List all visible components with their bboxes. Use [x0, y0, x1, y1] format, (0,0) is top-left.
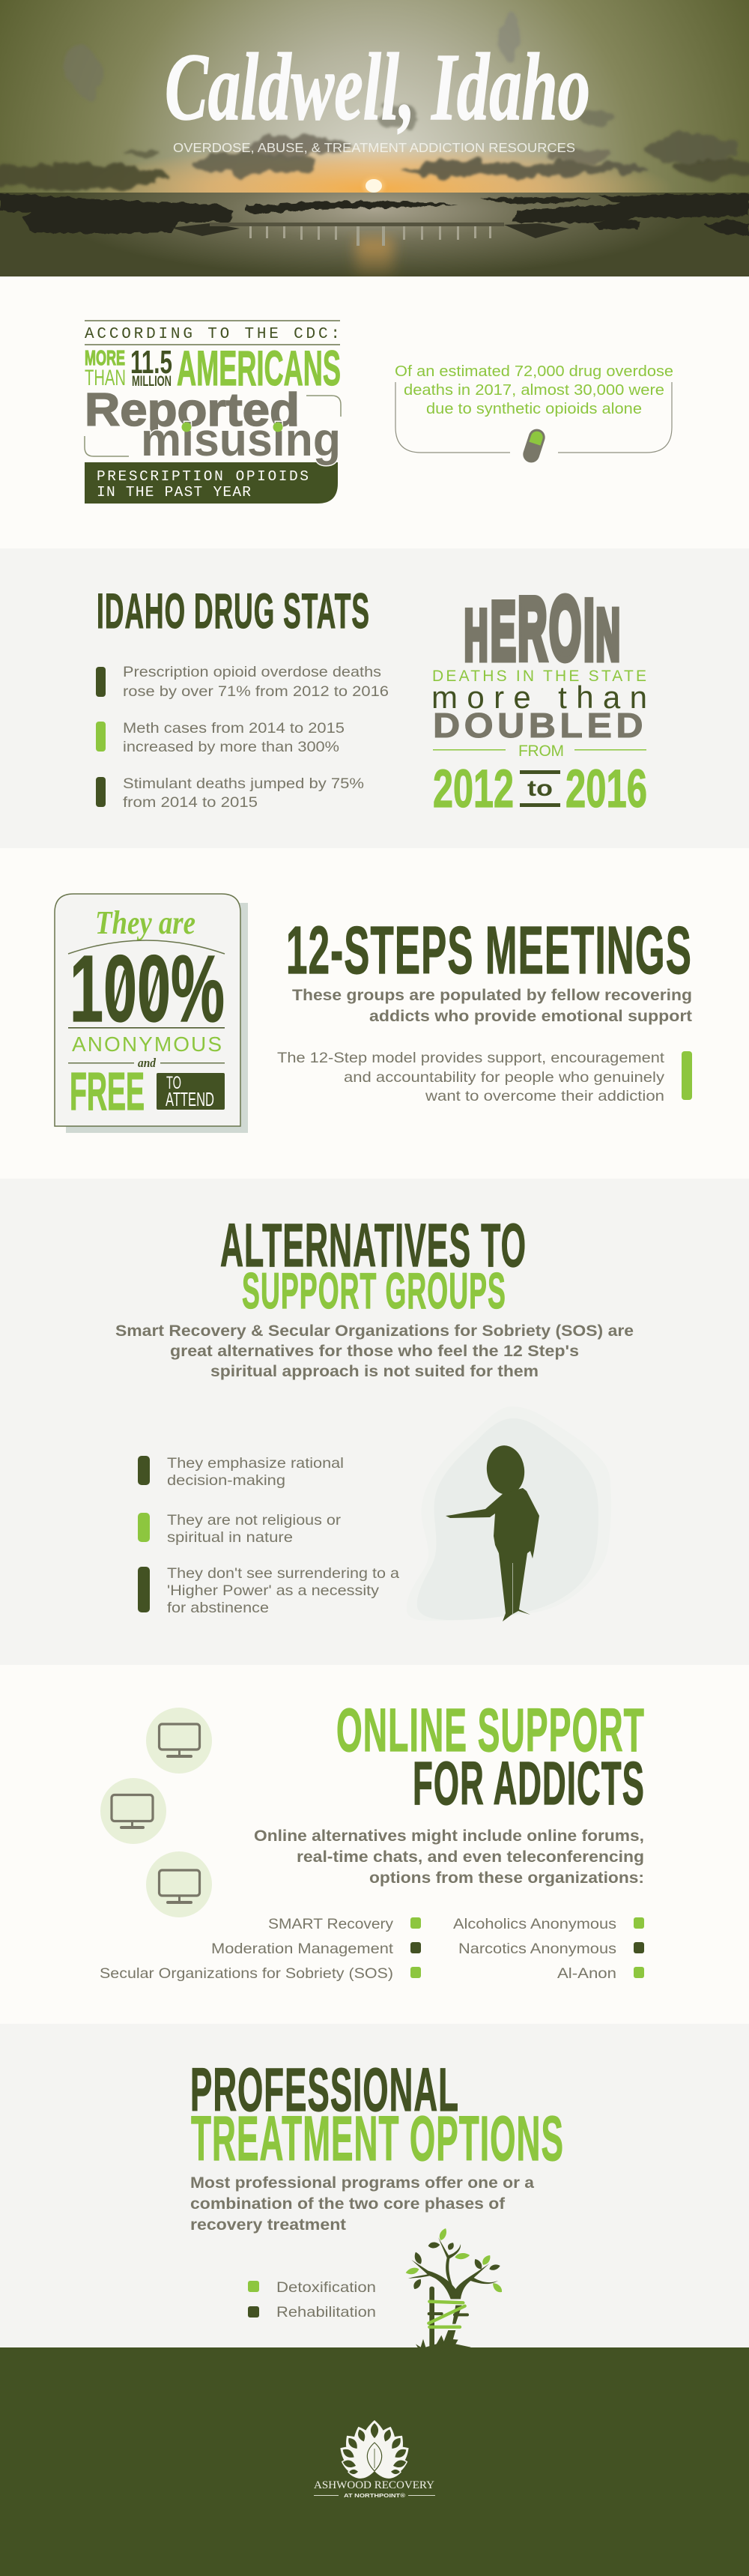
- 11.5 million: [130, 344, 172, 390]
- 100 percent: [70, 936, 225, 1041]
- anonymous: ANONYMOUS: [72, 1032, 222, 1056]
- according to the CDC: ACCORDING TO THE CDC:: [85, 326, 340, 343]
- lead text: spiritual approach is not suited for them: [210, 1363, 539, 1380]
- stat: meth cases: Meth cases from 2014 to 2015: [123, 720, 345, 737]
- from divider: FROM: [518, 743, 564, 760]
- point: not religious: spiritual in nature: [167, 1529, 293, 1546]
- lead text: recovery treatment: [190, 2216, 346, 2234]
- heading: [190, 2056, 564, 2174]
- lead text: [190, 2174, 534, 2234]
- heroin arched word: H: [464, 596, 488, 675]
- heroin arched word: O: [549, 578, 581, 679]
- more than: MORE: [85, 346, 125, 369]
- point: rational: They emphasize rational: [167, 1455, 344, 1472]
- reported: Reported: [85, 384, 300, 436]
- logo: lotus mark: [335, 2420, 414, 2480]
- lead text: Online alternatives might include online forums,: [254, 1827, 644, 1845]
- corner bracket top right: [306, 396, 341, 417]
- 100 percent: 100%: [70, 936, 225, 1041]
- stat: meth cases: increased by more than 300%: [123, 739, 339, 755]
- body text: and accountability for people who genuinely: [344, 1069, 664, 1086]
- callout text: deaths in 2017, almost 30,000 were: [404, 382, 664, 399]
- point: not religious: [138, 1512, 342, 1546]
- lead text: Smart Recovery & Secular Organizations for Sobriety (SOS) are: [115, 1322, 634, 1340]
- green dots: [181, 423, 283, 432]
- rule lines: [85, 320, 340, 345]
- lead text: [115, 1322, 634, 1380]
- logo: wordmark: ASHWOOD RECOVERY: [314, 2479, 434, 2491]
- callout outline: [395, 382, 672, 453]
- lead text: real-time chats, and even teleconferencing: [297, 1848, 644, 1866]
- year range: to: [527, 776, 553, 801]
- panel: online support: [0, 1665, 749, 2024]
- stat: prescription opioid: rose by over 71% from 2012 to 2016: [123, 683, 389, 700]
- stat: stimulant deaths: Stimulant deaths jumped by 75%: [123, 775, 364, 792]
- misusing: misusing: [141, 414, 341, 466]
- heroin arched word: R: [518, 581, 548, 679]
- point: rational: decision-making: [167, 1472, 285, 1489]
- icon: staked tree: [405, 2227, 504, 2348]
- body text: [277, 1050, 665, 1104]
- icon: monitor 3: [146, 1851, 212, 1917]
- organization list right: Alcoholics Anonymous: [453, 1916, 616, 1932]
- free: FREE: [70, 1062, 145, 1122]
- treatment phases: Detoxification: [276, 2279, 376, 2296]
- rule: [68, 1027, 225, 1028]
- point: not religious: They are not religious or: [167, 1512, 342, 1529]
- stat: meth cases: [96, 720, 345, 755]
- organization list left: Moderation Management: [211, 1941, 394, 1957]
- to attend box: ATTEND: [166, 1088, 214, 1110]
- panel: Idaho drug stats: [0, 548, 749, 848]
- callout text: Of an estimated 72,000 drug overdose: [395, 363, 673, 380]
- more than: more than: [431, 680, 647, 715]
- to attend box: [157, 1073, 225, 1110]
- heading: SUPPORT GROUPS: [242, 1263, 506, 1319]
- treatment phases: [248, 2279, 376, 2320]
- more than: THAN: [85, 366, 126, 390]
- point: higher power: [138, 1565, 399, 1616]
- prescription opioids banner: IN THE PAST YEAR: [97, 484, 251, 501]
- stat: prescription opioid: Prescription opioid overdose deaths: [123, 664, 381, 680]
- 11.5 million: MILLION: [132, 374, 172, 390]
- point: higher power: 'Higher Power' as a necessity: [167, 1582, 379, 1599]
- stat: prescription opioid: [96, 664, 389, 700]
- lead text: great alternatives for those who feel the 12 Step's: [170, 1343, 579, 1360]
- callout text: due to synthetic opioids alone: [426, 401, 642, 417]
- panel: professional treatment options: [0, 2024, 749, 2348]
- arc: [68, 940, 225, 954]
- organization list right: [453, 1916, 644, 1982]
- icon: pill: [521, 427, 548, 465]
- body text: The 12-Step model provides support, encouragement: [277, 1050, 665, 1066]
- heroin arched word: E: [491, 585, 516, 677]
- more than: [85, 346, 126, 390]
- blob background: [407, 1406, 611, 1621]
- lead text: combination of the two core phases of: [190, 2195, 506, 2213]
- accent bar: [682, 1051, 692, 1100]
- logo: tagline: AT NORTHPOINT®: [344, 2492, 406, 2499]
- treatment phases: Rehabilitation: [276, 2304, 376, 2320]
- doubled: DOUBLED: [433, 706, 647, 745]
- organization list left: [100, 1916, 421, 1982]
- heroin arched word: I: [583, 582, 595, 677]
- year range: 2012: [433, 760, 514, 819]
- organization list left: Secular Organizations for Sobriety (SOS): [100, 1965, 393, 1982]
- point: higher power: for abstinence: [167, 1600, 269, 1616]
- heading: IDAHO DRUG STATS: [97, 583, 370, 638]
- deaths in the state: DEATHS IN THE STATE: [432, 668, 646, 685]
- stat: stimulant deaths: from 2014 to 2015: [123, 794, 258, 811]
- heroin arched word: N: [596, 594, 620, 675]
- panel: CDC statistics: [0, 276, 749, 548]
- lead text: addicts who provide emotional support: [369, 1008, 692, 1025]
- icon: person silhouette: [446, 1443, 539, 1621]
- hero banner: [0, 0, 749, 276]
- heading: [336, 1696, 645, 1818]
- icon: monitor 2: [100, 1778, 166, 1844]
- body text: want to overcome their addiction: [425, 1088, 664, 1104]
- Americans: AMERICANS: [177, 340, 341, 396]
- icon: monitor 1: [146, 1708, 212, 1774]
- callout text: [395, 363, 673, 417]
- point: rational: [138, 1455, 344, 1489]
- organization list left: SMART Recovery: [268, 1916, 393, 1932]
- lead text: [292, 987, 692, 1025]
- year range: 2016: [565, 760, 647, 819]
- to attend box: TO: [166, 1073, 181, 1093]
- heading: PROFESSIONAL: [190, 2056, 459, 2124]
- panel: alternatives to support groups: [0, 1179, 749, 1665]
- card shadow: [66, 903, 248, 1133]
- organization list right: Narcotics Anonymous: [458, 1941, 616, 1957]
- lead text: options from these organizations:: [369, 1869, 644, 1887]
- sunset photo background: [0, 0, 749, 276]
- lead text: [254, 1827, 644, 1887]
- panel: footer: [0, 2347, 749, 2576]
- card: [55, 894, 240, 1126]
- subtitle: OVERDOSE, ABUSE, & TREATMENT ADDICTION RESOURCES: [173, 140, 575, 155]
- point: higher power: They don't see surrendering to a: [167, 1565, 399, 1582]
- heading: [220, 1212, 527, 1319]
- lead text: These groups are populated by fellow recovering: [292, 987, 692, 1004]
- corner bracket bottom left: [85, 436, 129, 456]
- year range: [433, 760, 647, 819]
- they are: They are: [95, 904, 195, 941]
- panel: 12-steps meetings: [0, 848, 749, 1179]
- lead text: Most professional programs offer one or a: [190, 2174, 534, 2192]
- prescription opioids banner: PRESCRIPTION OPIOIDS: [97, 468, 309, 485]
- 11.5 million: 11.5: [130, 344, 172, 381]
- prescription opioids banner: [85, 462, 338, 504]
- and divider: and: [138, 1056, 156, 1070]
- organization list right: Al-Anon: [557, 1965, 616, 1982]
- stat: stimulant deaths: [96, 775, 364, 811]
